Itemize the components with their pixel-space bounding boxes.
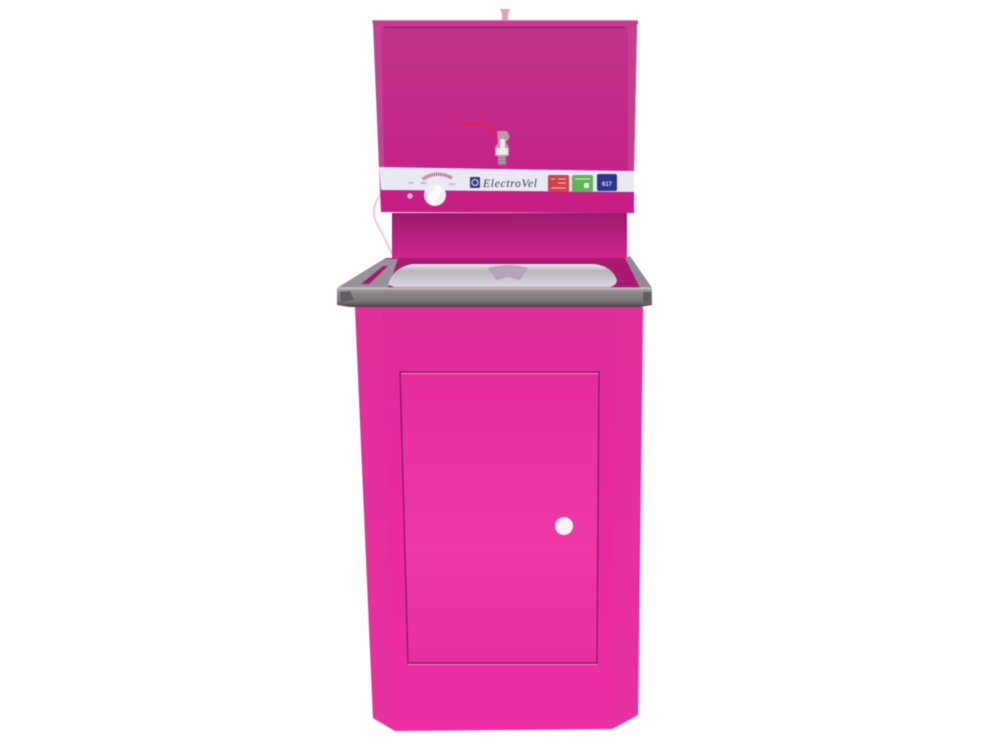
control label band: MIN: [421, 181, 426, 185]
sink deck: [337, 258, 652, 288]
right steel rim: [625, 256, 652, 288]
tap body: [495, 131, 510, 165]
cabinet: [355, 307, 643, 731]
power cord: [374, 194, 392, 254]
brand logo: [470, 177, 480, 188]
red badge: [548, 175, 569, 192]
brand name: ElectroVel: [482, 178, 537, 190]
left steel rim: [337, 259, 398, 288]
basin: [388, 264, 617, 287]
left facet: [355, 307, 395, 731]
tank lid knob: [500, 9, 510, 20]
control label band: OFF: [408, 181, 414, 185]
temperature scale: [423, 174, 452, 179]
tank lower band below label: [381, 190, 634, 213]
backsplash: [392, 213, 627, 259]
tank body: [373, 22, 637, 213]
thermostat dial: [424, 184, 446, 206]
faucet: [460, 124, 510, 165]
control label band: MAX: [449, 182, 456, 186]
red lever handle: [460, 124, 497, 134]
water tank: [372, 9, 638, 213]
control label band: 617: [602, 182, 613, 188]
cabinet body: [355, 307, 643, 731]
blue badge: [597, 174, 617, 191]
green badge: [572, 175, 593, 192]
control label band: [379, 167, 634, 192]
tank lid: [372, 20, 638, 27]
sink: [337, 256, 652, 307]
door knob: [555, 517, 573, 535]
right facet: [612, 307, 643, 729]
front steel edge: [337, 288, 652, 307]
indicator light: [407, 193, 413, 199]
cabinet door: [400, 372, 599, 663]
